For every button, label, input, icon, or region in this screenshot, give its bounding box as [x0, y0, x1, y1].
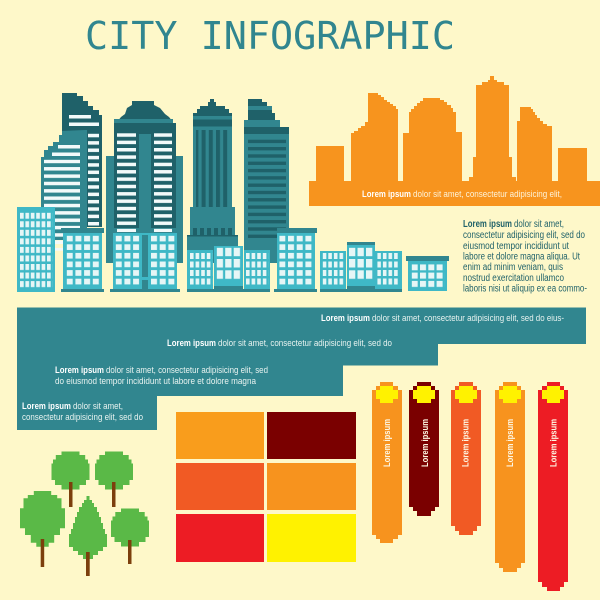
title: CITY INFOGRAPHIC — [85, 14, 455, 58]
pill 5 — [538, 382, 568, 591]
banner text row 3 — [55, 365, 268, 387]
tree 4 conifer — [69, 496, 107, 576]
pill 1 — [372, 382, 402, 543]
right text block: enim ad minim veniam, quis — [463, 262, 563, 273]
banner text row 4: dolor sit amet, — [73, 401, 123, 412]
banner text row 3: do eiusmod tempor incididunt ut labore et dolore magna — [55, 376, 257, 387]
banner text row 3: Lorem ipsum — [55, 365, 104, 376]
orange panel caption: dolor sit amet, consectetur adipisicing elit, — [413, 189, 562, 200]
banner text row 3: dolor sit amet, consectetur adipisicing elit, sed — [106, 365, 268, 376]
small building group 8 to 10 — [320, 242, 402, 292]
tower: wide central skyscraper — [106, 101, 183, 263]
orange panel caption: Lorem ipsum — [362, 189, 411, 200]
right text block: dolor sit amet, — [514, 219, 564, 230]
orange skyline silhouette — [309, 76, 600, 206]
pill 4: Lorem ipsum — [505, 419, 515, 467]
tree 1 — [52, 452, 90, 507]
banner text row 4: Lorem ipsum — [22, 401, 71, 412]
small building 11 — [406, 256, 449, 291]
pill 4 — [495, 382, 525, 572]
pill 3 — [451, 382, 481, 535]
right text block — [463, 219, 587, 294]
pill 1: Lorem ipsum — [382, 419, 392, 467]
small building 7 — [274, 228, 317, 292]
orange skyline panel — [309, 76, 600, 206]
small building 2 — [61, 228, 104, 292]
pill 5: Lorem ipsum — [548, 419, 558, 467]
small building 1 — [17, 207, 55, 292]
tower: striped skyscraper — [244, 99, 289, 263]
right text block: eiusmod tempor incididunt ut — [463, 241, 569, 252]
tree 3 — [20, 491, 65, 567]
small building group 4 to 6 — [187, 246, 270, 292]
banner text row 1: Lorem ipsum — [321, 313, 370, 324]
right text block: nostrud exercitation ullamco — [463, 273, 564, 284]
pill 3: Lorem ipsum — [460, 419, 470, 467]
banner text row 2: dolor sit amet, consectetur adipisicing elit, sed do — [218, 338, 392, 349]
tower: columned skyscraper — [187, 99, 238, 263]
banner text row 4 — [22, 401, 143, 423]
banner text row 1: dolor sit amet, consectetur adipisicing elit, sed do eius- — [372, 313, 564, 324]
pill 2: Lorem ipsum — [420, 419, 430, 467]
banner text row 4: consectetur adipisicing elit, sed do — [22, 412, 143, 423]
colour swatch grid — [176, 412, 356, 562]
banner text row 2: Lorem ipsum — [167, 338, 216, 349]
pill bars — [372, 382, 568, 591]
teal city skyline — [17, 93, 449, 292]
tower: stepped left skyscraper — [41, 93, 102, 263]
tree 5 — [111, 508, 149, 564]
trees — [20, 452, 149, 576]
stepped teal banner — [17, 308, 586, 430]
small building 3 — [110, 233, 180, 292]
right text block: Lorem ipsum — [463, 219, 512, 230]
pill 2 — [409, 382, 439, 516]
tree 2 — [95, 452, 133, 507]
